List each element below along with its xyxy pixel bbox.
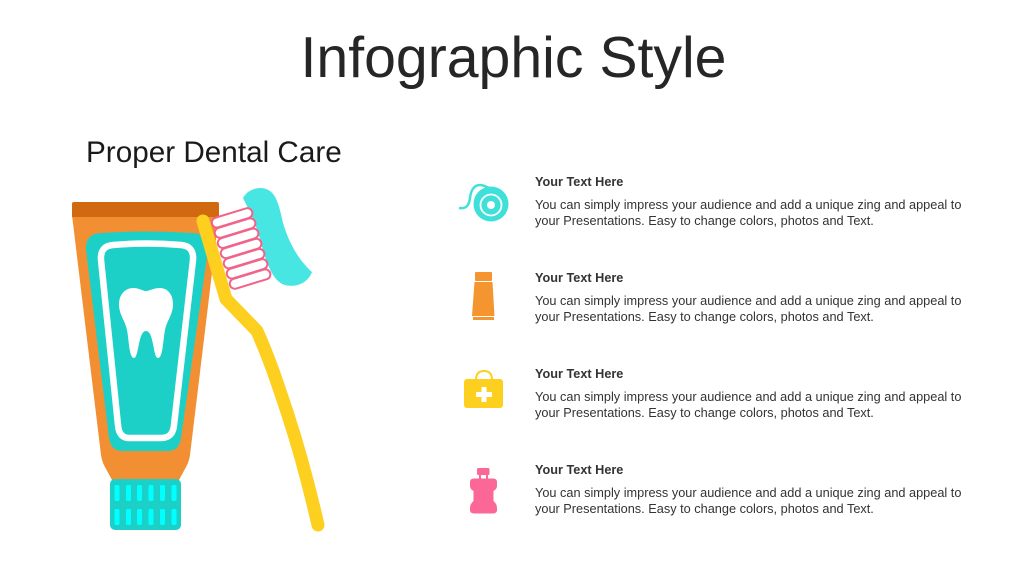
- icon: toothbrush: [203, 188, 318, 525]
- text block 3: [535, 367, 961, 420]
- text block 2: You can simply impress your audience and add a unique zing and appeal to: [535, 293, 961, 308]
- title: Infographic Style: [300, 26, 726, 90]
- text block 4: Your Text Here: [535, 463, 623, 477]
- text block 1: Your Text Here: [535, 175, 623, 189]
- toothpaste squeeze: [243, 188, 312, 286]
- text block 2: Your Text Here: [535, 271, 623, 285]
- icon: orange tube: [472, 272, 494, 320]
- text block 1: your Presentations. Easy to change colors, photos and Text.: [535, 212, 874, 228]
- text block 2: your Presentations. Easy to change colors, photos and Text.: [535, 308, 874, 324]
- bristles: [211, 207, 272, 290]
- text block 4: [535, 463, 961, 516]
- tube cap: [110, 479, 181, 530]
- icon: first aid bag: [464, 371, 503, 408]
- text block 4: your Presentations. Easy to change colors, photos and Text.: [535, 500, 874, 516]
- text block 2: [535, 271, 961, 324]
- icon: toothpaste tube: [72, 202, 219, 530]
- subtitle: Proper Dental Care: [86, 136, 342, 169]
- handle: [203, 221, 318, 525]
- text block 3: your Presentations. Easy to change colors, photos and Text.: [535, 404, 874, 420]
- icon: dental floss: [459, 185, 508, 222]
- icon: mouthwash bottle: [470, 468, 497, 514]
- label white frame: [101, 244, 193, 438]
- text block 4: You can simply impress your audience and add a unique zing and appeal to: [535, 485, 961, 500]
- icon: tooth: [119, 288, 173, 358]
- text block 1: [535, 175, 961, 228]
- text block 3: You can simply impress your audience and add a unique zing and appeal to: [535, 389, 961, 404]
- text block 1: You can simply impress your audience and add a unique zing and appeal to: [535, 197, 961, 212]
- text block 3: Your Text Here: [535, 367, 623, 381]
- tube body: [72, 215, 219, 480]
- label panel: [86, 232, 208, 451]
- tube crimp: [72, 202, 219, 217]
- cap ridges: [114, 485, 176, 525]
